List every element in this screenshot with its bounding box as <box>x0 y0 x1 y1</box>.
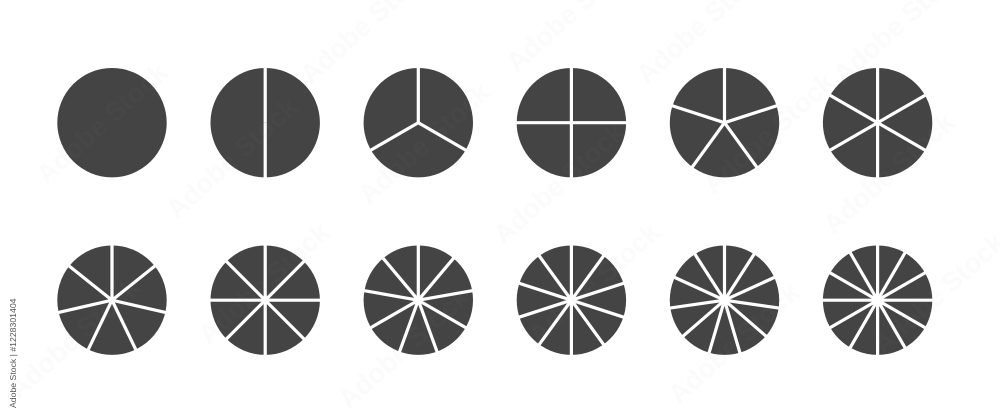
circle divided into 4 segments <box>514 66 628 180</box>
circle divided into 9 segments <box>362 243 474 355</box>
watermarks: Adobe Stock <box>3 271 146 405</box>
watermarks: Adobe Stock <box>353 76 496 210</box>
watermarks: Adobe Stock <box>663 276 806 410</box>
watermarks: Adobe Stock <box>333 281 476 415</box>
circle divided into 1 segment <box>57 68 167 177</box>
circle divided into 6 segments <box>823 66 932 180</box>
circle divided into 11 segments <box>668 243 781 355</box>
circle divided into 10 segments <box>517 243 626 357</box>
circle divided into 12 segments <box>821 243 935 357</box>
circle divided into 3 segments <box>364 66 473 177</box>
circle divided into 2 segments <box>211 66 320 180</box>
circle divided into 7 segments <box>56 243 168 355</box>
watermarks: Adobe Stock <box>523 216 666 350</box>
watermarks: Adobe Stock <box>31 56 174 190</box>
circle divided into 5 segments <box>670 66 779 177</box>
circle divided into 8 segments <box>208 243 322 357</box>
stock image id label: Adobe Stock | #1228301404 <box>8 298 18 408</box>
watermarks: Adobe Stock <box>161 91 304 225</box>
watermarks: Adobe Stock <box>193 216 336 350</box>
watermarks: Adobe Stock <box>488 116 631 250</box>
watermarks: Adobe Stock <box>698 66 841 200</box>
watermarks: Adobe Stock <box>818 106 961 240</box>
